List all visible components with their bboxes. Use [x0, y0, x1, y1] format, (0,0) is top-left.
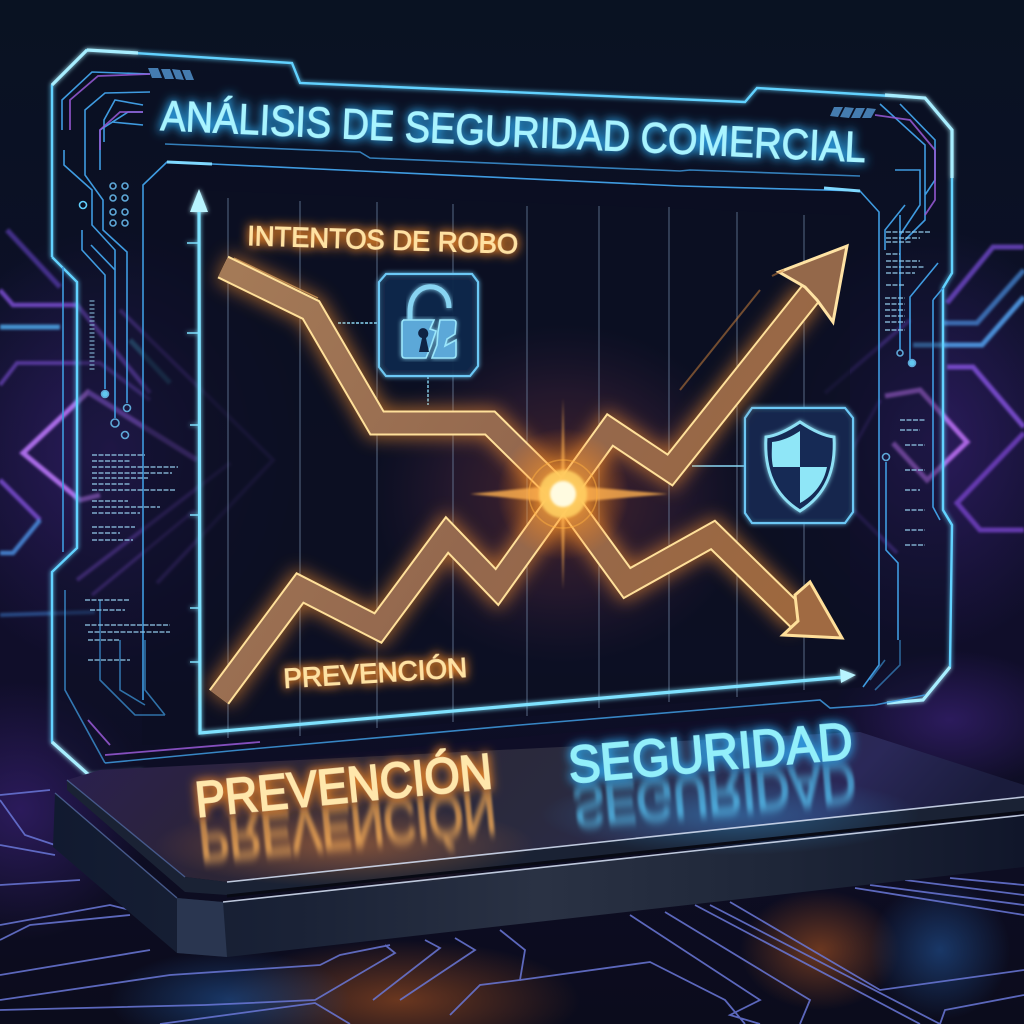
chart axes: [187, 189, 856, 733]
display panel: [52, 50, 952, 776]
label: prevencion in chart: PREVENCIÓN: [282, 652, 468, 694]
chart area tint: [142, 162, 879, 745]
crossing flare: [470, 398, 668, 590]
x axis arrow: [840, 669, 856, 683]
title: ANÁLISIS DE SEGURIDAD COMERCIAL: [160, 92, 867, 172]
purple frame accents: [70, 74, 935, 755]
background glows: [0, 230, 1024, 670]
shield connector: [692, 465, 745, 467]
frame data readouts: [85, 232, 930, 660]
y axis arrow: [190, 189, 208, 212]
word: seguridad: SEGURIDAD: [566, 712, 855, 795]
outer frame: [52, 50, 952, 776]
surface haze blue: [540, 775, 920, 855]
panel glass: [52, 50, 952, 776]
top surface: [67, 732, 1024, 882]
chart area darker centre: [200, 190, 850, 735]
icon: shield: [692, 408, 853, 523]
platform highlights: [223, 797, 1024, 902]
inner frame and title rule: [62, 72, 943, 763]
surface haze orange: [155, 803, 535, 887]
label: intentos de robo: INTENTOS DE ROBO: [247, 220, 519, 260]
floor glow: [0, 650, 1024, 1024]
background circuit pattern right: [825, 247, 1024, 553]
frame side nodes: [80, 183, 916, 460]
word: prevencion: PREVENCIÓN: [193, 743, 495, 828]
platform: [53, 732, 1024, 957]
background circuit pattern left: [0, 230, 273, 615]
grid lines: [228, 198, 804, 738]
warm glow behind crossing: [373, 324, 753, 664]
arrow line: intentos de robo trend: [223, 258, 842, 638]
reflection: seguridad: SEGURIDAD: [570, 750, 858, 838]
floor circuit lines: [0, 790, 1024, 1024]
lower step: [53, 793, 1024, 957]
arrow line: prevencion trend: [219, 246, 847, 697]
frame tick marks top: [148, 68, 876, 118]
lock connectors: [338, 323, 428, 405]
reflection: prevencion: PREVENCIÓN: [196, 778, 499, 874]
icon: open padlock: [338, 274, 478, 405]
